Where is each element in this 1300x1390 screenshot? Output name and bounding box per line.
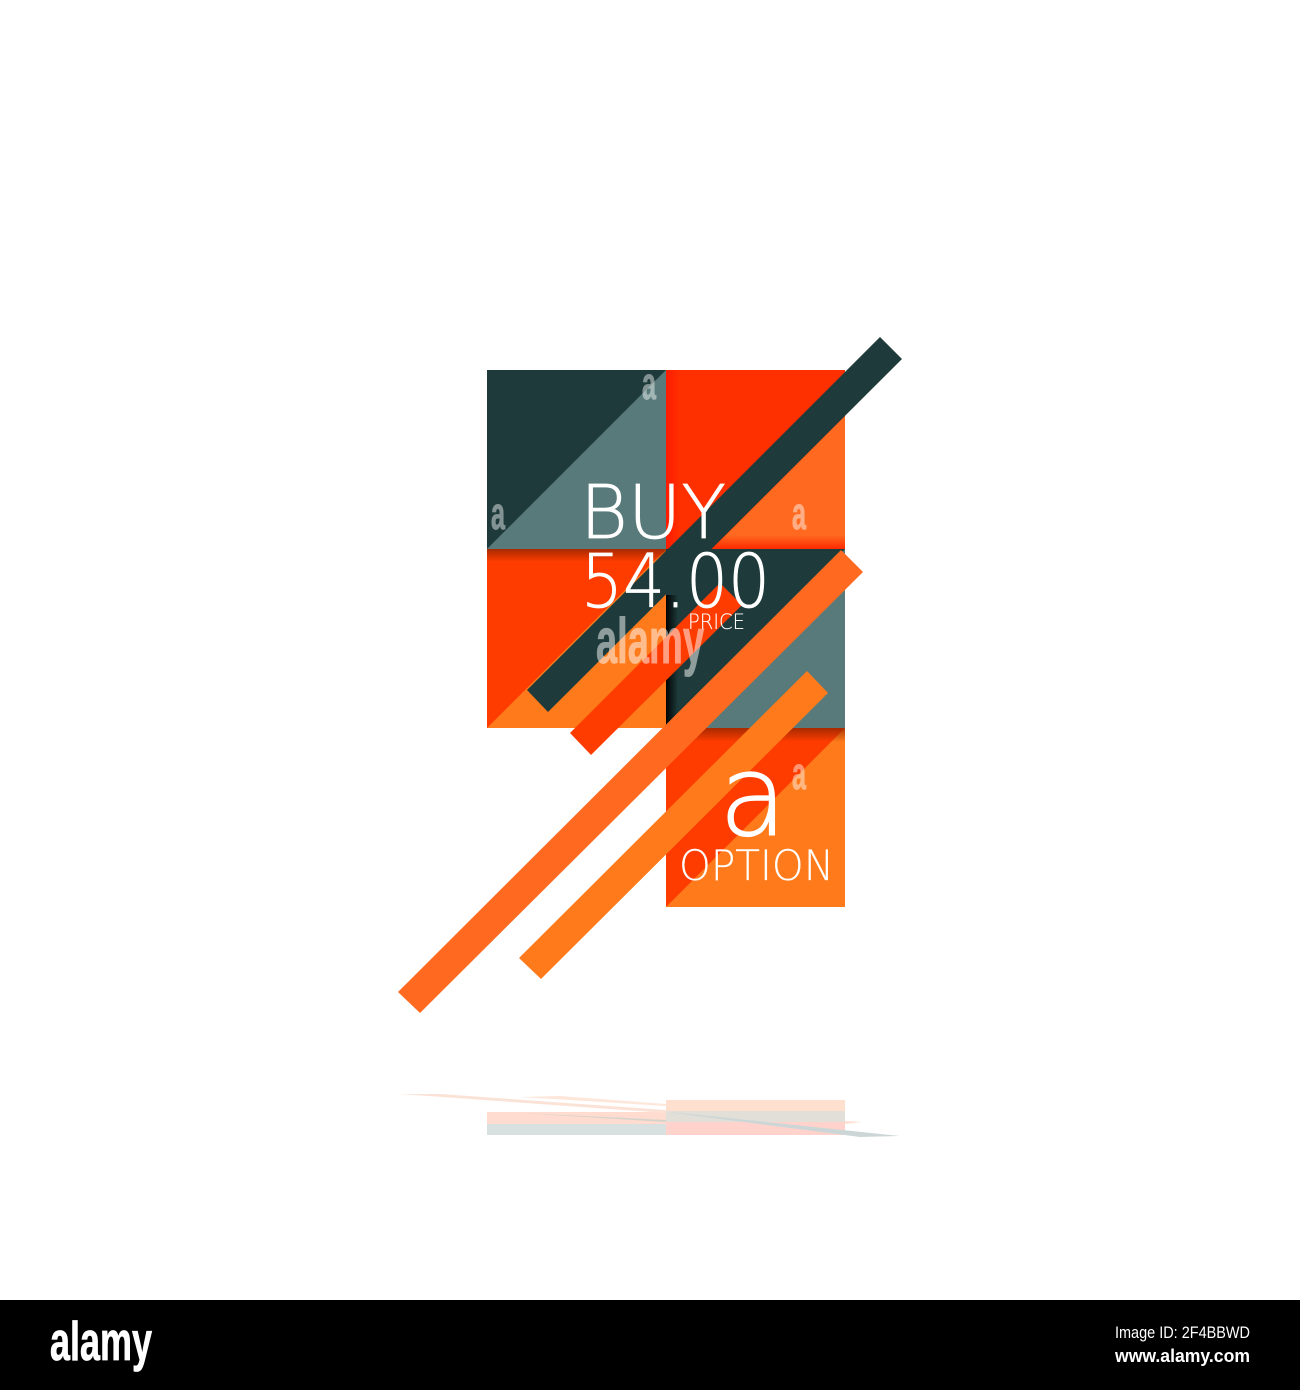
footer logo: alamy: alamy <box>50 1310 152 1372</box>
red diagonal bar <box>570 583 742 755</box>
panel: bottom-right square <box>666 728 845 907</box>
watermark: small a marks: a <box>792 748 807 799</box>
watermark: small a marks: a <box>792 488 807 539</box>
short orange diagonal bar <box>519 671 828 979</box>
label: OPTION: OPTION <box>679 841 834 890</box>
watermark: small a marks: a <box>491 488 506 539</box>
watermark: small a marks: a <box>642 358 657 409</box>
panel: middle-right square <box>666 549 845 728</box>
long orange diagonal bar <box>398 550 863 1013</box>
footer bar <box>0 1300 1300 1390</box>
watermark: alamy: alamy <box>596 605 704 677</box>
letter: a: a <box>719 732 787 862</box>
footer: website: www.alamy.com <box>1114 1346 1250 1366</box>
panel: middle-left square <box>487 549 666 728</box>
footer: image id: Image ID: 2F4BBWD <box>1115 1323 1250 1342</box>
dark diagonal bar <box>527 337 902 712</box>
watermark: small a marks <box>491 358 807 799</box>
reflection <box>400 1094 900 1137</box>
panel: top-left square <box>487 370 666 549</box>
label: PRICE: PRICE <box>688 610 745 634</box>
heading: BUY: BUY <box>580 470 726 556</box>
panel: top-right square <box>666 370 845 549</box>
price: 54.00: 54.00 <box>581 539 770 625</box>
